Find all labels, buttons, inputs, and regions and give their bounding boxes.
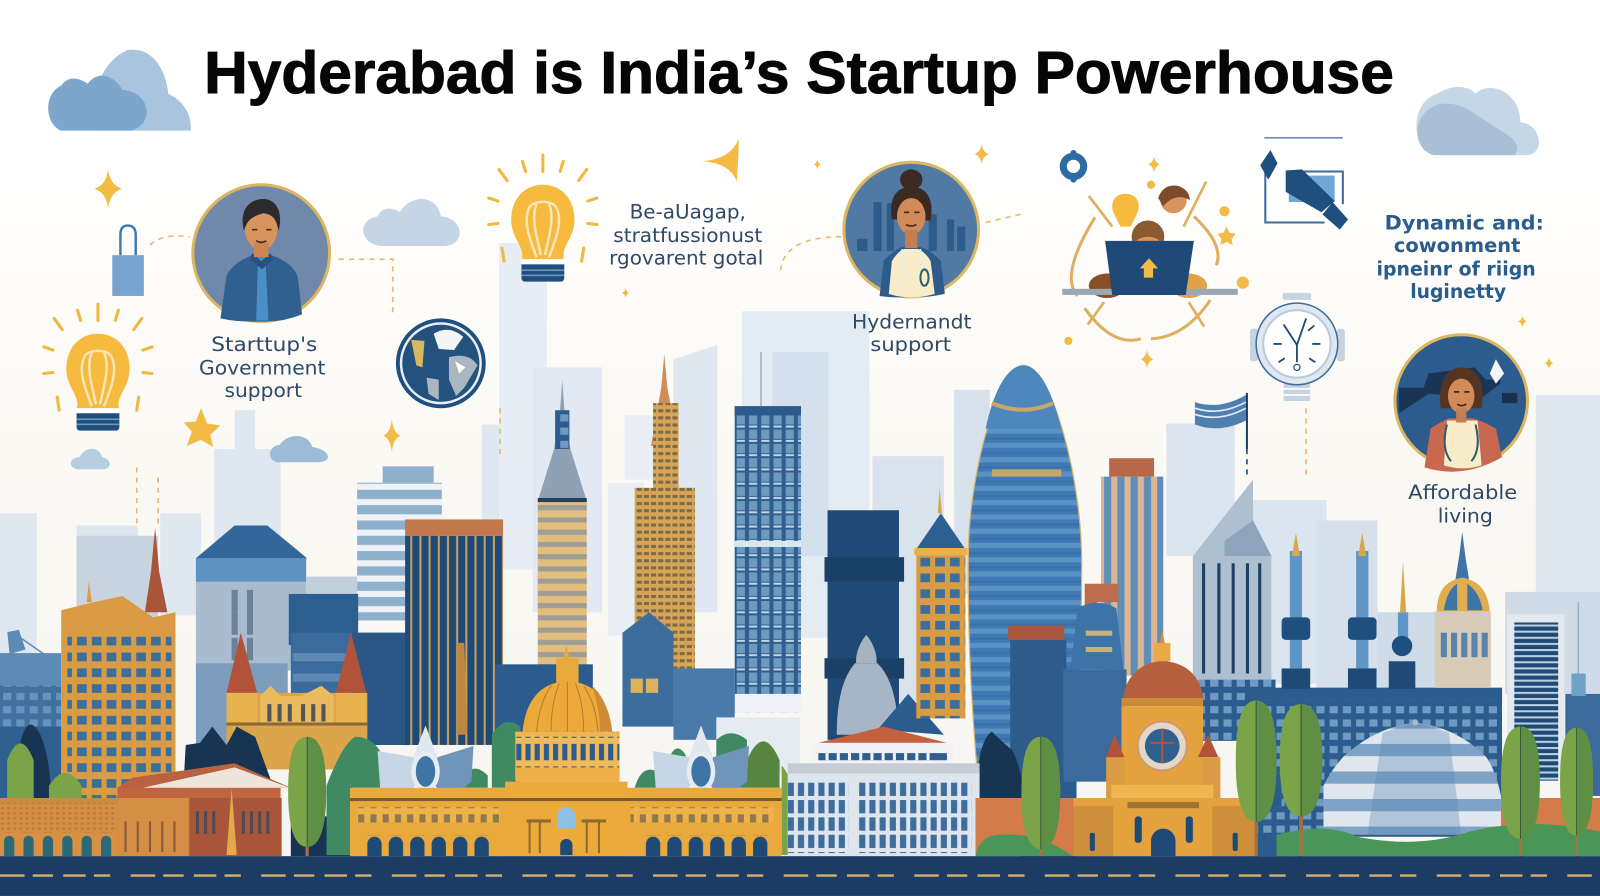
building: navy block with dome: [824, 510, 944, 740]
trees: dark cluster: [17, 725, 1282, 856]
building: gold lattice tower: [635, 354, 695, 669]
icon: laptop founder ring: [1062, 181, 1249, 345]
label: government support: Government: [199, 357, 326, 380]
building: red brick hall: [117, 763, 291, 856]
icon: light bulb left: [44, 304, 152, 431]
icon: cloud centre: [363, 199, 460, 246]
flowers: lotus sculptures: [378, 726, 749, 802]
building: far left blue block: [0, 631, 61, 803]
trees: green bushes: [327, 722, 800, 855]
trees: left greens: [7, 737, 780, 896]
building: glass cylinder with flag: [1008, 584, 1127, 857]
building: castle with red cones: [227, 633, 367, 769]
skyline: far background towers: [0, 243, 1600, 701]
trees: right greens: [976, 701, 1600, 896]
building: gold office with spire: [61, 528, 176, 801]
icon: tiny cloud left: [71, 449, 110, 469]
icon: globe: [396, 318, 486, 408]
panel: portrait of woman, affordable living: [1395, 335, 1528, 472]
icon: flag: [1195, 393, 1248, 449]
label: dynamic environment: ipneinr of riign: [1377, 258, 1536, 281]
building: grey block with pyramid roof: [77, 526, 357, 670]
building: blue glass block: [196, 594, 418, 765]
icon: framed arrows: [1260, 138, 1348, 230]
icon: small cloud left: [270, 436, 328, 462]
connector lines: [137, 214, 1306, 524]
label: dynamic environment: [1377, 212, 1544, 303]
building: small blue tower block: [457, 612, 800, 774]
label: affordable living: Affordable: [1408, 481, 1517, 504]
building: dark pinstripe tower: [405, 519, 503, 745]
building: tower with gold facade: [914, 488, 967, 718]
building: striped dome: [1323, 719, 1501, 835]
building: white neoclassical hall: [788, 727, 980, 856]
label: bulb caption: Be-aUagap,: [630, 200, 746, 223]
icon: sparkles: [95, 139, 1553, 452]
label: affordable living: [1408, 481, 1517, 527]
label: bulb caption: stratfussionust: [613, 224, 763, 247]
building: blue glass tower: [735, 352, 801, 712]
label: bulb caption: [609, 200, 763, 269]
icon: clock bulb: [1250, 293, 1345, 401]
label: government support: Starttup's: [211, 333, 317, 356]
label: Hydernandt support: support: [870, 333, 951, 356]
road: [0, 856, 1600, 896]
building: sand tower with grey spire: [538, 380, 587, 669]
panel: portrait of man: [193, 185, 330, 322]
label: government support: [199, 333, 326, 402]
icon: large cloud top left: [48, 50, 191, 131]
title: Hyderabad is India’s Startup Powerhouse: [204, 39, 1394, 106]
building: clock tower: [1072, 630, 1256, 856]
label: Hydernandt support: Hydernandt: [852, 311, 972, 334]
label: dynamic environment: cowonment: [1394, 234, 1520, 257]
icon: shopping bag: [112, 226, 144, 296]
icon: gear: [1063, 150, 1084, 183]
label: dynamic environment: Dynamic and:: [1385, 212, 1544, 235]
building: right office block: [1198, 680, 1502, 856]
building: golden capitol: [350, 645, 782, 856]
label: government support: support: [224, 379, 302, 402]
icon: light bulb top: [489, 155, 597, 282]
label: bulb caption: rgovarent gotal: [609, 246, 763, 269]
label: affordable living: living: [1438, 504, 1493, 527]
building: twin minarets: [1282, 533, 1415, 689]
building: domed tower: [1435, 532, 1491, 688]
building: navy striped tower: [1501, 602, 1600, 837]
panel: portrait of woman with stethoscope: [844, 162, 979, 297]
building: orange arcade left: [0, 798, 122, 856]
label: dynamic environment: luginetty: [1410, 280, 1506, 303]
icon: cloud top right: [1416, 87, 1539, 155]
building: gherkin tower: [968, 365, 1082, 776]
label: Hydernandt support: [852, 311, 972, 356]
building: grey tower with dark lines: [1193, 480, 1271, 680]
building: copper-topped stripe tower: [1101, 458, 1163, 676]
building: striped white tower: [357, 466, 442, 620]
